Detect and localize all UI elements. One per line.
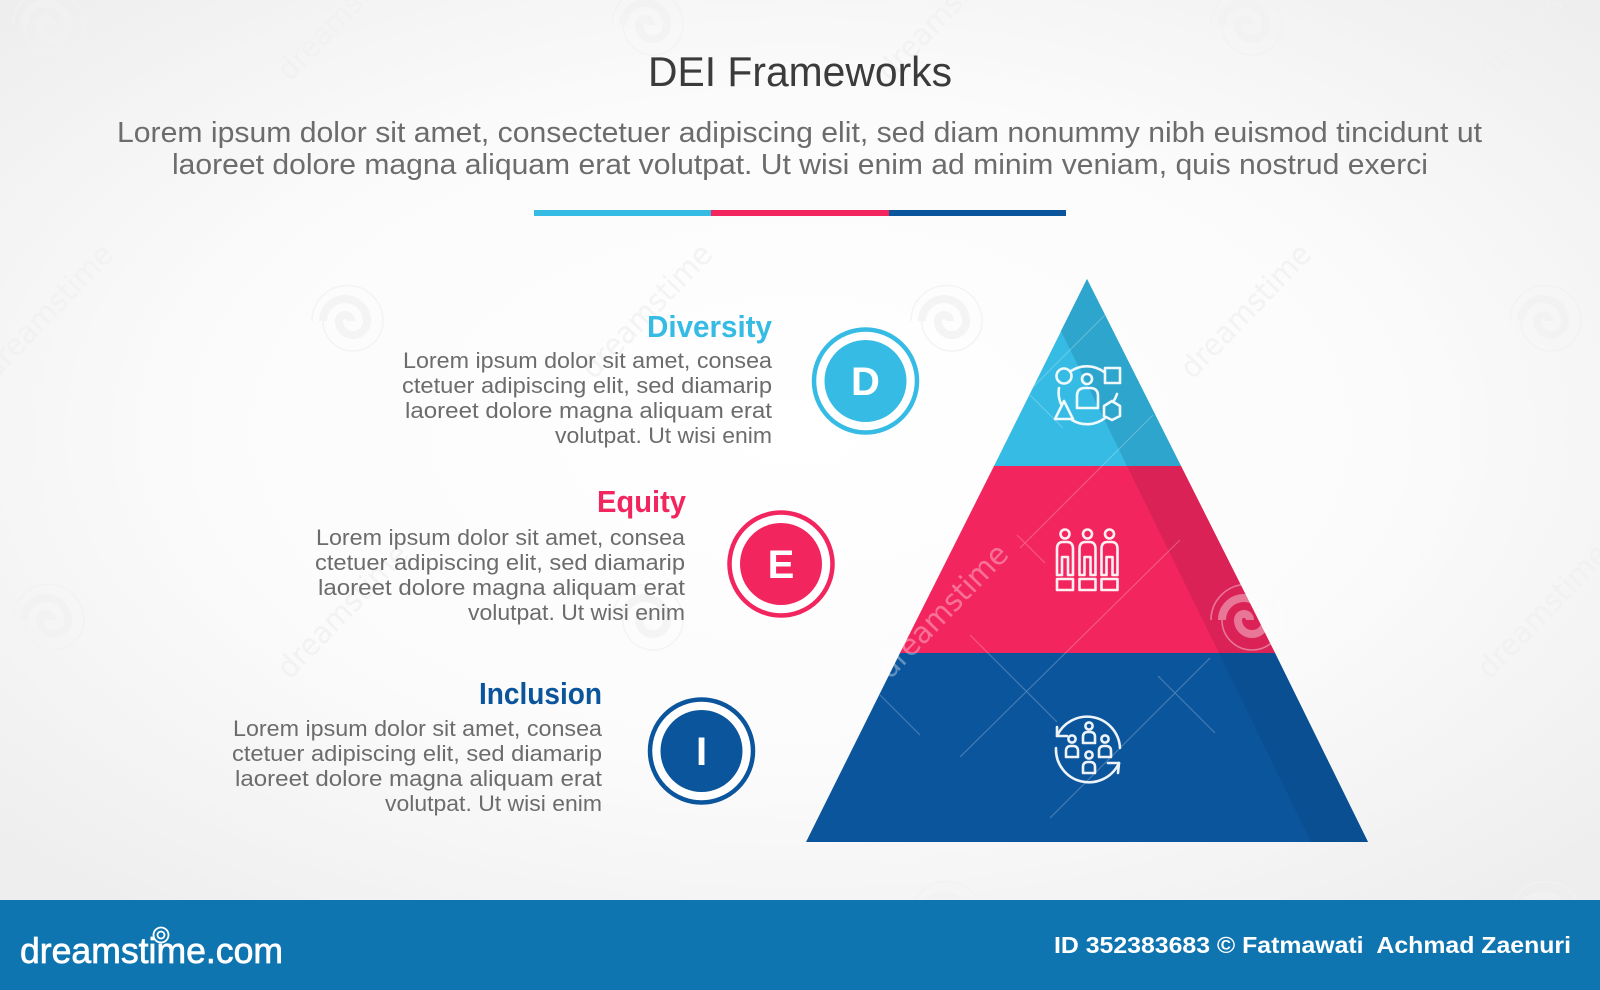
footer logo spiral: [154, 928, 168, 942]
badge: D: D: [851, 360, 880, 404]
heading: inclusion: Inclusion: [479, 676, 602, 711]
heading: equity: Equity: [597, 484, 687, 519]
text block: inclusion: laoreet dolore magna aliquam erat: [235, 766, 602, 791]
subtitle text block: [117, 117, 1482, 181]
badge: E: E: [768, 543, 794, 587]
watermark: diagonal wordmarks on background: dreamstime: [574, 237, 720, 386]
icon: equity: [1057, 530, 1118, 590]
pyramid tier: equity: [900, 466, 1275, 653]
text block: inclusion: [232, 716, 603, 816]
text block: equity: [315, 525, 686, 625]
text block: inclusion: volutpat. Ut wisi enim: [385, 791, 602, 816]
text block: diversity: volutpat. Ut wisi enim: [555, 423, 772, 448]
footer credit: ID 352383683 © Fatmawati Achmad Zaenuri: [1054, 932, 1571, 958]
text block: diversity: Lorem ipsum dolor sit amet, consea: [403, 348, 773, 373]
item: inclusion: [232, 676, 753, 816]
text block: diversity: ctetuer adipiscing elit, sed diamarip: [402, 373, 772, 398]
watermark wordmark on pyramid: dreamstime: [870, 537, 1016, 686]
watermark: diagonal wordmarks on background: dreamstime: [1173, 237, 1319, 386]
footer logo text: dreamstime.com: [20, 930, 283, 971]
text block: inclusion: ctetuer adipiscing elit, sed diamarip: [232, 741, 602, 766]
badge: I: I: [696, 730, 707, 774]
text block: equity: volutpat. Ut wisi enim: [468, 600, 685, 625]
watermark: diagonal wordmarks on background: [0, 0, 1600, 686]
text block: diversity: [402, 348, 773, 448]
badge: D: [814, 330, 917, 432]
watermark spiral on pyramid: [1211, 584, 1282, 650]
item: equity: [315, 484, 832, 625]
item: diversity: [402, 309, 917, 448]
text block: inclusion: Lorem ipsum dolor sit amet, consea: [233, 716, 603, 741]
heading: diversity: Diversity: [647, 309, 773, 344]
title: DEI Frameworks: [648, 48, 952, 95]
badge: E: [730, 512, 832, 616]
text block: equity: ctetuer adipiscing elit, sed diamarip: [315, 550, 685, 575]
text block: equity: laoreet dolore magna aliquam erat: [318, 575, 685, 600]
footer band: [0, 900, 1600, 990]
icon: diversity: [1055, 366, 1120, 424]
text block: diversity: laoreet dolore magna aliquam erat: [405, 398, 772, 423]
icon: inclusion: [1056, 717, 1120, 782]
pyramid shaded side: diversity: [1061, 279, 1181, 466]
pyramid tier: inclusion: [806, 653, 1368, 842]
subtitle text block: laoreet dolore magna aliquam erat volutpat. Ut wisi enim ad minim veniam, quis nostrud exerci: [172, 149, 1428, 181]
subtitle text block: Lorem ipsum dolor sit amet, consectetuer adipiscing elit, sed diam nonummy nibh euismod tincidunt ut: [117, 117, 1482, 149]
pyramid tier: diversity: [994, 279, 1181, 466]
badge: I: [650, 700, 753, 802]
watermark lines on pyramid: [880, 315, 1215, 818]
tricolor divider: [534, 210, 1066, 216]
pyramid shaded side: inclusion: [1219, 653, 1368, 842]
pyramid chart: [806, 279, 1368, 842]
watermark: diagonal wordmarks on background: dreamstime: [270, 537, 416, 686]
text block: equity: Lorem ipsum dolor sit amet, consea: [316, 525, 686, 550]
pyramid shaded side: equity: [1127, 466, 1275, 653]
